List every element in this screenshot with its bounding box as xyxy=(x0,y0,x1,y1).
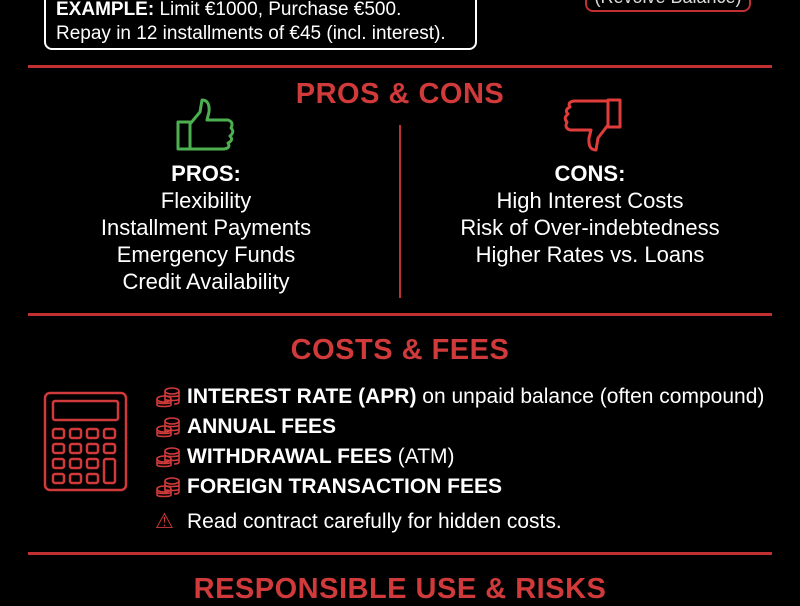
cons list: High Interest Costs xyxy=(496,188,684,213)
cons list: Higher Rates vs. Loans xyxy=(476,242,704,267)
costs list xyxy=(156,385,764,498)
cons list: Risk of Over-indebtedness xyxy=(460,215,720,240)
warning note: ⚠ xyxy=(155,510,174,533)
cons list xyxy=(460,161,720,267)
icon: thumbs down xyxy=(564,98,622,152)
icon: calculator xyxy=(44,392,128,492)
example box xyxy=(44,0,477,50)
pros list: Flexibility xyxy=(161,188,251,213)
divider xyxy=(399,125,401,298)
pros list: Installment Payments xyxy=(101,215,311,240)
cons list: CONS: xyxy=(555,161,625,186)
title: pros & cons: PROS & CONS xyxy=(296,78,504,110)
revolve balance box xyxy=(585,0,751,12)
title: responsible use: RESPONSIBLE USE & RISKS xyxy=(194,573,606,605)
pros list: Emergency Funds xyxy=(117,242,295,267)
item: annual: ANNUAL FEES xyxy=(187,415,336,438)
pros list: Credit Availability xyxy=(122,269,290,294)
example box: Repay in 12 installments of €45 (incl. interest). xyxy=(56,23,446,44)
warning note: Read contract carefully for hidden costs. xyxy=(187,510,562,533)
item: withdrawal: WITHDRAWAL FEES (ATM) xyxy=(187,445,455,468)
item: interest: INTEREST RATE (APR) on unpaid balance (often compound) xyxy=(187,385,764,408)
pros list: PROS: xyxy=(171,161,241,186)
pros list xyxy=(101,161,311,294)
title: costs & fees: COSTS & FEES xyxy=(291,334,509,366)
icon: thumbs up xyxy=(176,98,234,150)
item: foreign: FOREIGN TRANSACTION FEES xyxy=(187,475,502,498)
